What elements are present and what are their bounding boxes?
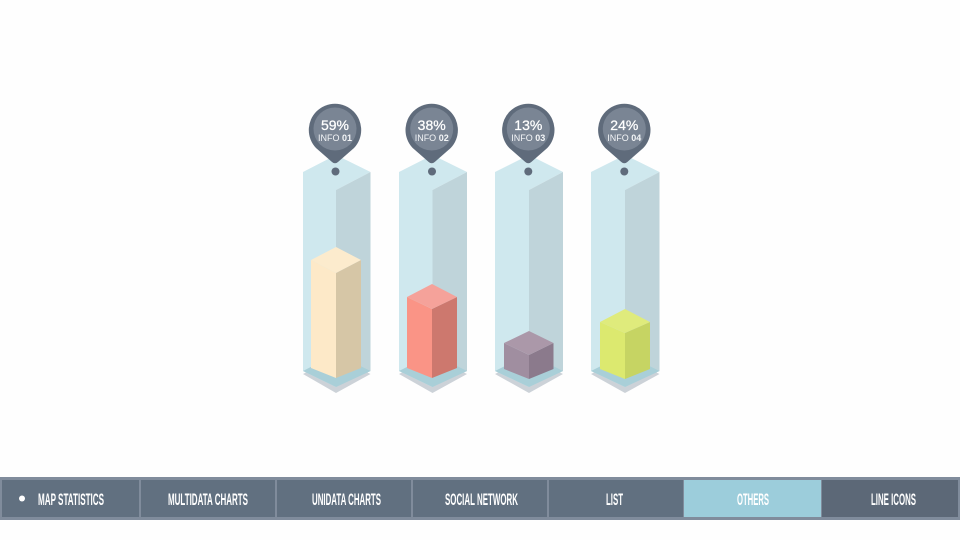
column 2 value: 38%	[418, 117, 446, 133]
column 4 pin	[598, 104, 650, 176]
tab: multidata charts: MULTIDATA CHARTS	[168, 490, 248, 509]
tab: unidata charts: UNIDATA CHARTS	[312, 490, 381, 509]
tab: unidata charts	[277, 480, 411, 517]
column 4 glass tube	[591, 155, 660, 387]
column 3 mauve bar	[504, 331, 554, 379]
column 4 floor shadow	[591, 357, 660, 393]
tab: map statistics	[2, 480, 139, 517]
column 4 lime bar	[600, 309, 650, 379]
column 1: 59%	[303, 104, 370, 393]
column 4 label: INFO 04	[607, 133, 641, 143]
tab: others (active)	[684, 480, 821, 517]
tab: multidata charts	[141, 480, 275, 517]
tab: map statistics: MAP STATISTICS	[38, 490, 104, 509]
column 2 pin	[406, 104, 458, 176]
tab: others (active): OTHERS	[737, 490, 769, 509]
column 3 label: INFO 03	[511, 133, 545, 143]
navigation bar	[0, 477, 960, 520]
column 1 floor shadow	[303, 357, 370, 393]
tab: line icons	[822, 480, 958, 517]
column 2 floor shadow	[399, 357, 467, 393]
tab: list: LIST	[606, 490, 623, 509]
column 2 glass tube	[399, 155, 467, 387]
column 3 value: 13%	[514, 117, 542, 133]
tab: social network: SOCIAL NETWORK	[445, 490, 518, 509]
column 1 pin	[309, 104, 361, 176]
column 2: 38%	[399, 104, 467, 393]
column 4 value: 24%	[610, 117, 638, 133]
column 1 value: 59%	[321, 117, 349, 133]
column 4: 24%	[591, 104, 660, 393]
tab: social network	[413, 480, 547, 517]
tab: list	[549, 480, 683, 517]
column 3: 13%	[495, 104, 563, 393]
column 1 glass tube	[303, 155, 370, 387]
column 1 cream bar	[311, 247, 361, 378]
column 2 label: INFO 02	[415, 133, 449, 143]
column 3 glass tube	[495, 155, 563, 387]
column 3 pin	[502, 104, 554, 176]
column 3 floor shadow	[495, 357, 563, 393]
column 1 label: INFO 01	[318, 133, 352, 143]
column 2 coral bar	[407, 284, 457, 378]
